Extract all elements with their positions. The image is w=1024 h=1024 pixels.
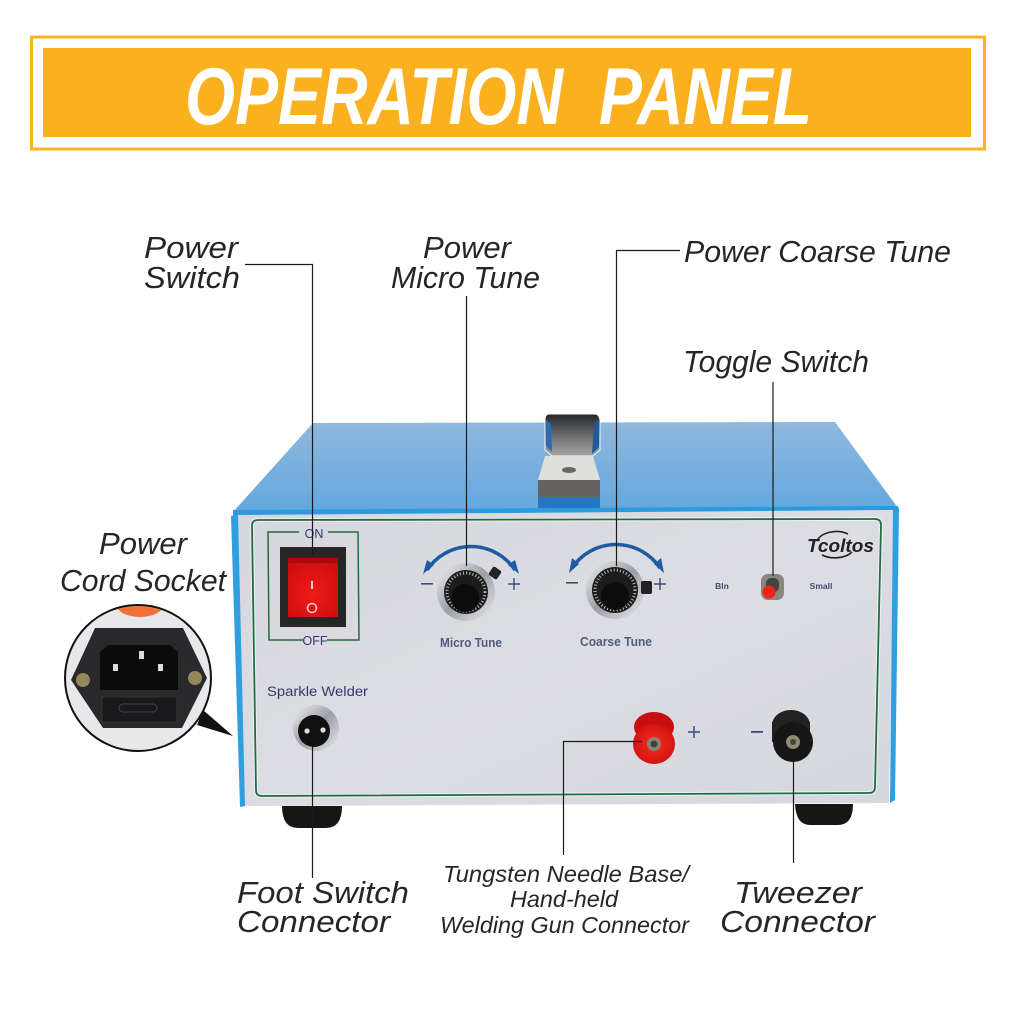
label: power micro tune	[391, 230, 540, 566]
logo: Tcoltos	[807, 536, 874, 556]
right side strip	[890, 508, 899, 803]
left foot	[282, 806, 342, 828]
black post	[751, 710, 813, 762]
label: foot switch connector: Connector	[237, 904, 392, 939]
minus sign	[751, 731, 763, 733]
coarse tune dial	[566, 545, 666, 649]
label: power cord socket: Cord Socket	[60, 563, 227, 598]
title: OPERATION	[185, 52, 564, 142]
label: power switch	[144, 230, 312, 555]
socket body	[71, 628, 207, 728]
label: foot switch connector	[237, 746, 409, 939]
label: toggle switch: Toggle Switch	[683, 344, 869, 379]
red post	[633, 712, 700, 764]
label: power coarse tune	[616, 234, 951, 566]
welder machine	[231, 414, 899, 828]
machine top	[233, 422, 898, 512]
micro tune dial	[421, 547, 520, 650]
label: tweezer connector	[720, 760, 877, 939]
left side strip	[231, 514, 245, 807]
label: tweezer connector: Tweezer	[734, 875, 864, 910]
label: power switch: Switch	[144, 260, 240, 295]
label: foot switch connector: Foot Switch	[237, 875, 409, 910]
label: tungsten needle base: Hand-held	[510, 886, 619, 912]
label: power micro tune: Power	[423, 230, 513, 265]
ON label: ON	[305, 527, 323, 541]
power switch	[268, 527, 359, 648]
label: tungsten needle base	[440, 742, 692, 938]
plus sign	[688, 726, 700, 738]
OFF label: OFF	[302, 634, 328, 648]
label: tweezer connector: Connector	[720, 904, 877, 939]
green panel border	[252, 519, 881, 796]
callout pointer	[197, 710, 233, 736]
front panel	[237, 510, 894, 806]
Small label: Small	[810, 581, 832, 591]
label: power micro tune: Micro Tune	[391, 260, 540, 295]
label: power cord socket: Power	[99, 526, 189, 561]
title banner	[32, 37, 984, 149]
title: PANEL	[599, 52, 812, 142]
right foot	[795, 804, 853, 825]
toggle switch	[715, 574, 832, 600]
label: tungsten needle base: Tungsten Needle Base/	[443, 861, 692, 887]
coarse tune label: Coarse Tune	[580, 635, 652, 649]
micro tune label: Micro Tune	[440, 636, 502, 650]
power cord socket callout	[65, 591, 233, 751]
Bin label: Bln	[715, 581, 729, 591]
label: tungsten needle base: Welding Gun Connector	[440, 912, 690, 938]
label: power cord socket	[60, 526, 227, 598]
sparkle welder connector	[267, 684, 369, 751]
sparkle welder label: Sparkle Welder	[267, 684, 369, 699]
label: power coarse tune: Power Coarse Tune	[684, 234, 951, 269]
handle	[538, 414, 600, 508]
label: power switch: Power	[144, 230, 240, 265]
